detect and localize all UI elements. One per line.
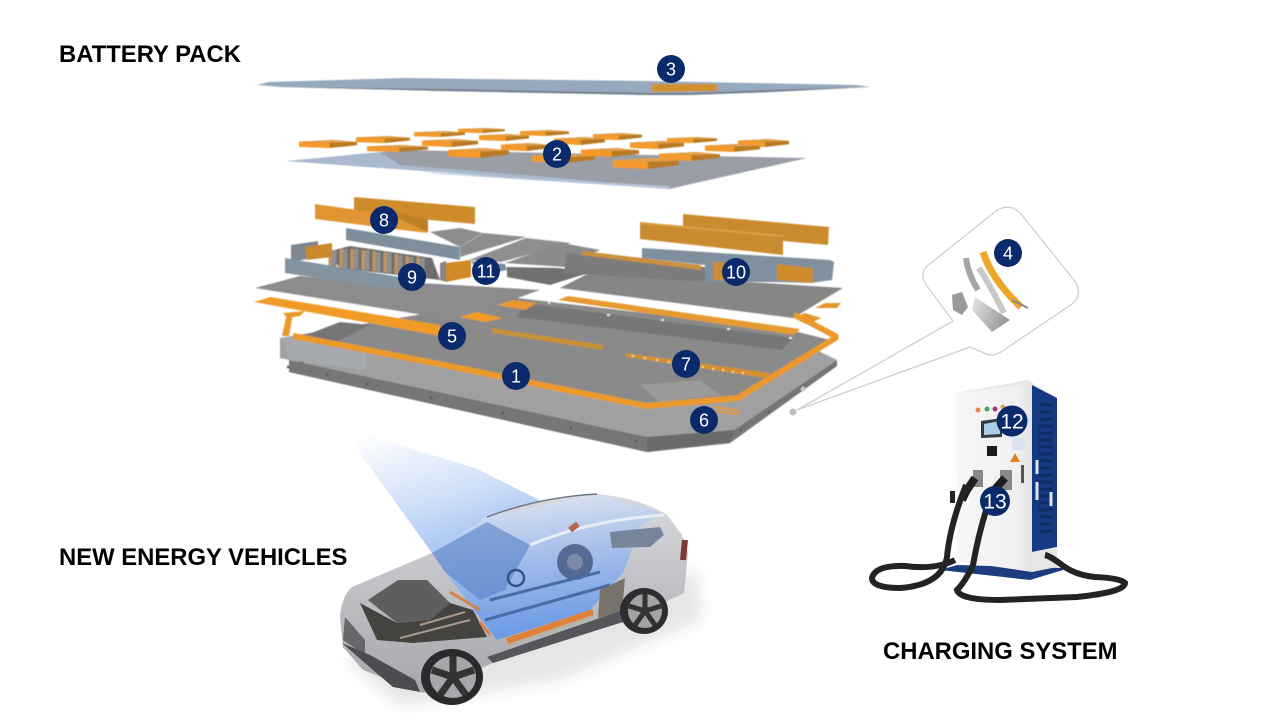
badge 4 — [994, 239, 1022, 267]
callout: part 4 enlargement — [797, 207, 1079, 410]
badge 5 — [438, 322, 466, 350]
badge 4: 4 — [1003, 244, 1013, 264]
title: new energy vehicles: NEW ENERGY VEHICLES — [59, 544, 347, 571]
beam: blue projection from pack to vehicle — [342, 428, 630, 640]
illustration: charging station — [872, 380, 1125, 600]
badge 6: 6 — [699, 410, 709, 430]
badge 10 — [722, 258, 750, 286]
badge 3: 3 — [666, 60, 676, 80]
badge 9: 9 — [407, 268, 417, 288]
panel: right module group with part 10 — [564, 214, 834, 283]
badge 12: 12 — [1000, 410, 1024, 434]
badge 13 — [980, 486, 1010, 516]
badge 2 — [543, 140, 571, 168]
badge 7 — [672, 350, 700, 378]
badge 8 — [370, 206, 398, 234]
badge 3 — [657, 55, 685, 83]
badge 13: 13 — [983, 490, 1007, 514]
badge 8: 8 — [379, 210, 389, 230]
badge 7: 7 — [681, 354, 691, 374]
badge 5: 5 — [447, 326, 457, 346]
panel: upper plate with orange part 2 blocks — [287, 128, 807, 189]
title: battery pack: BATTERY PACK — [59, 41, 241, 68]
badge 2: 2 — [552, 144, 562, 164]
illustration: cutaway vehicle — [340, 494, 702, 706]
badge 1: 1 — [511, 366, 521, 386]
badge 10: 10 — [726, 262, 746, 282]
panel: left module group with parts 8 and 9 — [285, 197, 483, 290]
icon: small bolt part — [790, 386, 806, 416]
panel: top cover plate with part 3 — [257, 78, 870, 95]
badge 11: 11 — [477, 262, 495, 282]
badge 11 — [472, 257, 500, 285]
title: charging system: CHARGING SYSTEM — [883, 638, 1117, 665]
badge 9 — [398, 263, 426, 291]
panel: centre module group with part 11 — [460, 233, 600, 285]
badge 6 — [690, 406, 718, 434]
badge 1 — [502, 362, 530, 390]
badge 12 — [996, 406, 1028, 436]
panel: battery tray with orange sealing frame — [254, 272, 843, 452]
